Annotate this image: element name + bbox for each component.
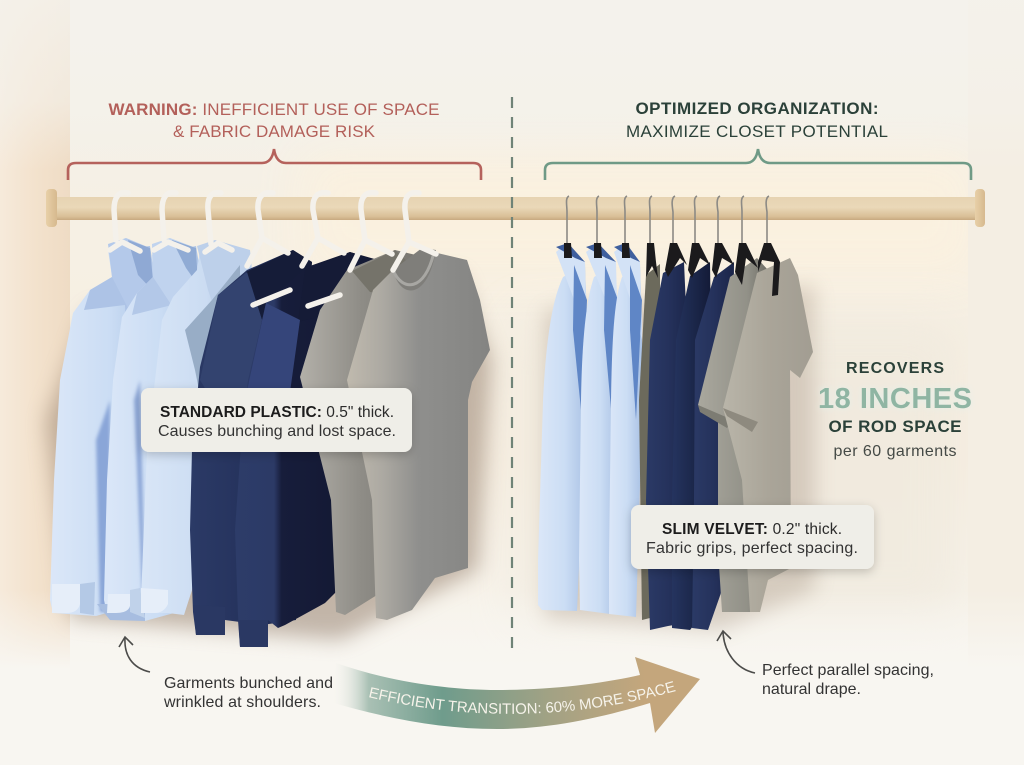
left heading: warning: WARNING: INEFFICIENT USE OF SPACE <box>108 100 440 119</box>
note: garments bunched: wrinkled at shoulders. <box>163 694 321 711</box>
callout: slim velvet <box>631 505 874 569</box>
right heading: optimized organization <box>626 99 888 141</box>
grey tee 2 <box>723 258 813 612</box>
garment shadow <box>46 275 492 640</box>
stat: recovers 18 inches: RECOVERS <box>846 360 944 377</box>
right heading: optimized organization: MAXIMIZE CLOSET POTENTIAL <box>626 122 888 141</box>
shirt 1 <box>50 238 158 616</box>
divider dashed line <box>511 97 513 650</box>
blue shirts <box>538 243 642 617</box>
navy cardigan 2 <box>235 252 385 647</box>
transition arrow: EFFICIENT TRANSITION: 60% MORE SPACE <box>369 681 676 714</box>
right garment shadow <box>545 285 815 630</box>
note: garments bunched: Garments bunched and <box>164 675 333 692</box>
shirt 2 <box>97 238 205 621</box>
stat: recovers 18 inches: per 60 garments <box>834 443 956 460</box>
olive knit <box>639 264 660 620</box>
callout: standard plastic: Causes bunching and lost space. <box>158 423 396 440</box>
white plastic hangers <box>110 193 436 306</box>
left heading: warning <box>108 100 440 141</box>
hanger 2 <box>154 193 188 250</box>
note: perfect spacing: Perfect parallel spacing, <box>762 662 934 679</box>
transition arrow <box>344 657 700 733</box>
black velvet arms <box>564 243 780 296</box>
stat: recovers 18 inches: 18 INCHES <box>818 383 972 415</box>
callout: slim velvet: SLIM VELVET: 0.2" thick. <box>662 521 842 538</box>
note: perfect spacing <box>762 662 934 698</box>
left heading: warning: & FABRIC DAMAGE RISK <box>173 122 376 141</box>
hanger 5 <box>302 193 344 306</box>
stat: recovers 18 inches: OF ROD SPACE <box>828 417 962 436</box>
note: perfect spacing: natural drape. <box>762 681 861 698</box>
right garments on velvet hangers <box>538 243 813 630</box>
stat: recovers 18 inches <box>818 360 972 460</box>
left garments on plastic hangers <box>50 238 490 647</box>
callout: standard plastic: STANDARD PLASTIC: 0.5" thick. <box>160 404 394 421</box>
grey tee 1 <box>698 258 768 612</box>
grey tee 2 <box>347 248 490 620</box>
wooden rod <box>46 189 985 227</box>
hanger 7 <box>393 193 436 270</box>
navy knit 1 <box>190 250 312 635</box>
velvet hangers <box>564 196 780 296</box>
right bracket <box>545 149 971 180</box>
left bracket <box>68 149 481 180</box>
hanger 6 <box>350 193 392 270</box>
shirt 3 <box>141 240 254 615</box>
arrow: to left garments <box>119 637 150 672</box>
callout: slim velvet: Fabric grips, perfect spacing. <box>646 540 858 557</box>
wire hooks <box>566 196 769 244</box>
hanger 3 <box>205 193 232 252</box>
right heading: optimized organization: OPTIMIZED ORGANIZATION: <box>636 99 878 118</box>
arrow: to right garments <box>717 631 755 673</box>
stat: recovers 18 inches: 18 INCHES <box>818 383 972 415</box>
hanger 4 <box>247 193 290 305</box>
note: garments bunched <box>163 675 333 711</box>
navy knits <box>646 262 734 630</box>
callout: standard plastic <box>141 388 412 452</box>
hanger 1 <box>110 193 140 251</box>
grey tee 1 <box>300 250 420 615</box>
